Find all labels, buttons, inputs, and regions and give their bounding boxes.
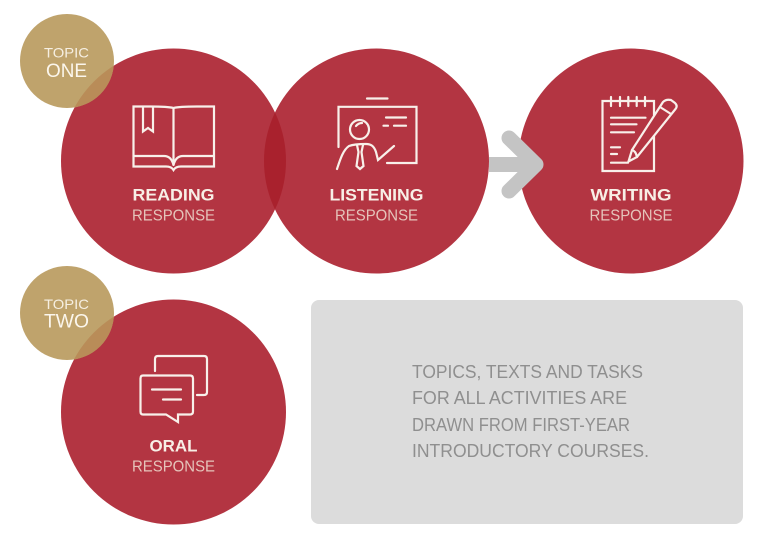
panel: listening response bbox=[264, 48, 489, 274]
icon: speech bubbles bbox=[140, 356, 207, 422]
badge: topic two bbox=[20, 266, 114, 360]
text block: note: DRAWN FROM FIRST-YEAR bbox=[412, 415, 630, 435]
label: topic: TOPIC bbox=[44, 296, 89, 312]
text block: note: INTRODUCTORY COURSES. bbox=[412, 441, 649, 461]
panel: writing response bbox=[518, 48, 744, 274]
label: topic: TOPIC bbox=[44, 44, 89, 60]
icon: open book bbox=[134, 106, 214, 170]
icon: notepad and pencil bbox=[602, 97, 677, 171]
arrow: reading and listening lead to writing bbox=[489, 138, 536, 191]
badge: topic one bbox=[20, 14, 114, 108]
label: writing response: RESPONSE bbox=[590, 208, 672, 224]
panel: reading response bbox=[61, 48, 286, 274]
label: reading response: RESPONSE bbox=[132, 208, 215, 224]
text block: note bbox=[412, 362, 649, 461]
text block: note: TOPICS, TEXTS AND TASKS bbox=[412, 362, 643, 382]
text block: note: FOR ALL ACTIVITIES ARE bbox=[412, 388, 627, 408]
icon: teacher at board bbox=[337, 98, 416, 169]
panel: note box bbox=[311, 300, 743, 524]
label: writing: WRITING bbox=[590, 186, 672, 204]
label: oral response: RESPONSE bbox=[132, 458, 215, 476]
panel: oral response bbox=[61, 300, 286, 524]
label: listening: LISTENING bbox=[330, 186, 424, 204]
label: reading: READING bbox=[132, 186, 214, 204]
label: listening response: RESPONSE bbox=[335, 208, 418, 224]
label: one: ONE bbox=[46, 61, 87, 82]
label: two: TWO bbox=[44, 312, 89, 332]
label: oral: ORAL bbox=[150, 436, 198, 456]
